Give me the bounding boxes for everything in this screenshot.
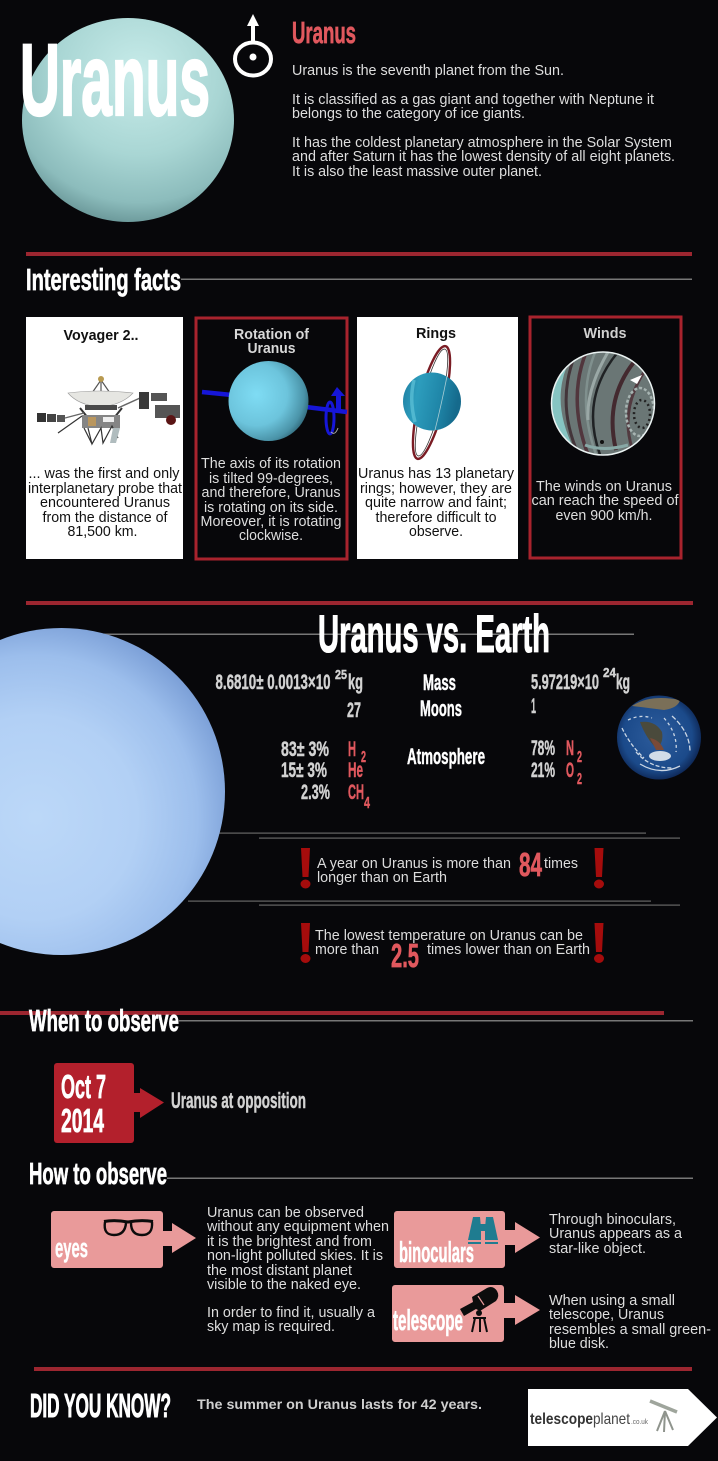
card text: and therefore, Uranus: [202, 484, 340, 501]
comparison: mass: 25: [335, 667, 347, 682]
card title: Rotation of: [234, 326, 310, 343]
icon: exclamation mark: [300, 923, 310, 963]
card text: therefore difficult to: [376, 509, 496, 526]
card text: clockwise.: [239, 527, 303, 544]
comparison: atmosphere: 2: [577, 771, 582, 788]
logo text: telescope: [530, 1411, 593, 1428]
text: telescope description: [549, 1292, 711, 1352]
heading: Uranus: Uranus: [292, 15, 356, 50]
card text: Moreover, it is rotating: [200, 513, 342, 530]
logo text: [530, 1411, 648, 1428]
comparison: mass: kg: [616, 671, 630, 694]
comparison: moons: [347, 695, 536, 722]
text: telescope description: When using a small: [549, 1292, 675, 1309]
panel: Winds: [530, 317, 681, 558]
intro paragraphs: [292, 62, 675, 180]
comparison: atmosphere: 15± 3%: [281, 759, 327, 782]
comparison: atmosphere: He: [348, 759, 363, 782]
text: binoculars description: Uranus appears as a: [549, 1225, 683, 1242]
text: binoculars description: [549, 1211, 683, 1257]
callout text: longer than on Earth: [317, 870, 447, 886]
card text: interplanetary probe that: [28, 480, 183, 497]
card text: The axis of its rotation: [201, 455, 341, 472]
card text: observe.: [409, 523, 463, 540]
intro paragraphs: and after Saturn it has the lowest density of all eight planets.: [292, 148, 675, 165]
text: eyes description: sky map is required.: [207, 1318, 335, 1335]
callout text: [315, 928, 590, 958]
text: telescope description: telescope, Uranus: [549, 1306, 664, 1323]
card text: quite narrow and faint;: [365, 494, 507, 511]
text: eyes description: the most distant planet: [207, 1262, 353, 1279]
card title: [234, 326, 310, 357]
icon: Uranus astronomical symbol: [235, 14, 271, 76]
text: telescope description: resembles a small green-: [549, 1321, 711, 1338]
comparison: mass: 5.97219×10: [531, 671, 599, 694]
comparison: atmosphere: Atmosphere: [407, 744, 485, 769]
card text: can reach the speed of: [532, 492, 679, 509]
callout: a year on Uranus: [300, 846, 604, 888]
icon: large Uranus disk: [0, 628, 225, 955]
comparison: atmosphere: 2: [577, 749, 582, 766]
comparison: mass: 24: [603, 665, 617, 680]
icon: telescope: [460, 1287, 498, 1332]
icon: ringed planet: [403, 343, 461, 462]
card title: Voyager 2..: [64, 327, 138, 344]
panel: Rings: [357, 317, 518, 559]
logo: telescopeplanet: [528, 1389, 717, 1446]
card text: [358, 465, 514, 540]
comparison: mass: Mass: [423, 670, 456, 695]
text: binoculars description: Through binoculars,: [549, 1211, 676, 1228]
icon: striped Uranus: [552, 350, 654, 460]
intro text block: [292, 15, 675, 180]
text: eyes description: Uranus can be observed: [207, 1204, 364, 1221]
card text: [200, 455, 342, 544]
title: Uranus: Uranus: [20, 23, 210, 137]
text: eyes description: In order to find it, usually a: [207, 1304, 376, 1321]
icon: Earth: [617, 696, 701, 780]
callout text: times lower than on Earth: [427, 942, 590, 958]
intro paragraphs: belongs to the category of ice giants.: [292, 105, 525, 122]
comparison: atmosphere: [281, 737, 582, 812]
card text: encountered Uranus: [40, 494, 170, 511]
text: eyes description: without any equipment when: [206, 1218, 389, 1235]
card text: from the distance of: [42, 509, 168, 526]
icon: Uranus planet: [22, 18, 234, 222]
comparison: mass: 8.6810± 0.0013×10: [216, 671, 330, 694]
card title: Winds: [584, 325, 626, 342]
panel: binoculars: [394, 1211, 540, 1269]
intro paragraphs: It has the coldest planetary atmosphere in the Solar System: [292, 134, 672, 151]
card title: Uranus: [248, 340, 296, 357]
big number: 2.5: 2.5: [391, 937, 419, 974]
date text: [61, 1068, 106, 1139]
icon: exclamation mark: [594, 923, 604, 963]
date box with arrow: [54, 1063, 164, 1143]
heading: When to observe: When to observe: [29, 1003, 179, 1038]
callout text: times: [544, 856, 578, 872]
comparison: atmosphere: O: [566, 759, 574, 782]
big number: 84: 84: [519, 846, 542, 883]
card text: The winds on Uranus: [536, 478, 672, 495]
panel: telescope: [392, 1285, 540, 1342]
text: eyes description: non-light polluted skies. It is: [207, 1247, 383, 1264]
heading: How to observe: How to observe: [29, 1156, 167, 1191]
text: eyes description: visible to the naked eye.: [207, 1276, 361, 1293]
label: telescope: telescope: [393, 1305, 463, 1337]
comparison: atmosphere: CH: [348, 781, 364, 804]
comparison: atmosphere: H: [348, 738, 356, 761]
comparison: atmosphere: 2.3%: [301, 781, 330, 804]
text: binoculars description: star-like object.: [549, 1240, 646, 1257]
card text: [532, 478, 679, 524]
card text: Uranus has 13 planetary: [358, 465, 514, 482]
callout text: The lowest temperature on Uranus can be: [315, 928, 583, 944]
comparison: atmosphere: N: [566, 737, 574, 760]
callout: lowest temperature: [300, 923, 604, 974]
label: eyes: eyes: [55, 1233, 88, 1263]
logo text: planet: [593, 1411, 630, 1428]
card text: is rotating on its side.: [204, 499, 338, 516]
panel: eyes: [51, 1211, 196, 1268]
panel: Rotation of Uranus: [196, 318, 347, 559]
card text: even 900 km/h.: [556, 507, 652, 524]
heading: Did you know: DID YOU KNOW?: [30, 1387, 171, 1424]
comparison: mass: [216, 665, 630, 695]
text: eyes description: [206, 1204, 389, 1335]
text: eyes description: it is the brightest and from: [207, 1233, 372, 1250]
card text: is tilted 99-degrees,: [209, 470, 333, 487]
icon: binoculars: [468, 1217, 498, 1244]
callout text: more than: [315, 942, 379, 958]
comparison: moons: Moons: [420, 696, 462, 721]
intro paragraphs: It is classified as a gas giant and together with Neptune it: [292, 91, 655, 108]
callout text: A year on Uranus is more than: [317, 856, 511, 872]
comparison: atmosphere: 83± 3%: [281, 738, 329, 761]
card text: ... was the first and only: [28, 465, 180, 482]
icon: tilted planet with rotation axis: [202, 361, 347, 441]
comparison: atmosphere: 4: [364, 795, 370, 812]
intro paragraphs: Uranus is the seventh planet from the Sun.: [292, 62, 564, 79]
comparison: mass: kg: [348, 671, 363, 694]
text: did you know fact: The summer on Uranus lasts for 42 years.: [197, 1396, 482, 1412]
comparison: moons: 27: [347, 699, 361, 722]
label: binoculars: binoculars: [399, 1237, 474, 1269]
comparison: atmosphere: 78%: [531, 737, 555, 760]
date text: Oct 7: [61, 1068, 106, 1105]
icon: exclamation mark: [300, 848, 310, 888]
icon: glasses: [104, 1221, 153, 1235]
date text: 2014: [61, 1102, 104, 1139]
text: Uranus at opposition: Uranus at opposition: [171, 1088, 306, 1113]
card text: 81,500 km.: [68, 523, 138, 540]
logo text: .co.uk: [631, 1419, 648, 1426]
text: telescope description: blue disk.: [549, 1335, 609, 1352]
card text: [28, 465, 183, 540]
card text: rings; however, they are: [360, 480, 512, 497]
comparison: atmosphere: 2: [361, 749, 366, 766]
icon: Voyager probe: [37, 376, 180, 444]
heading: Interesting facts: Interesting facts: [26, 262, 181, 297]
callout text: [317, 856, 578, 886]
card title: Rings: [416, 325, 456, 342]
text: 1: [531, 695, 536, 718]
intro paragraphs: It is also the least massive outer planet.: [292, 163, 542, 180]
panel: Voyager 2: [26, 317, 183, 559]
icon: exclamation mark: [594, 848, 604, 888]
icon: logo telescope: [650, 1401, 677, 1432]
comparison: atmosphere: 21%: [531, 759, 555, 782]
